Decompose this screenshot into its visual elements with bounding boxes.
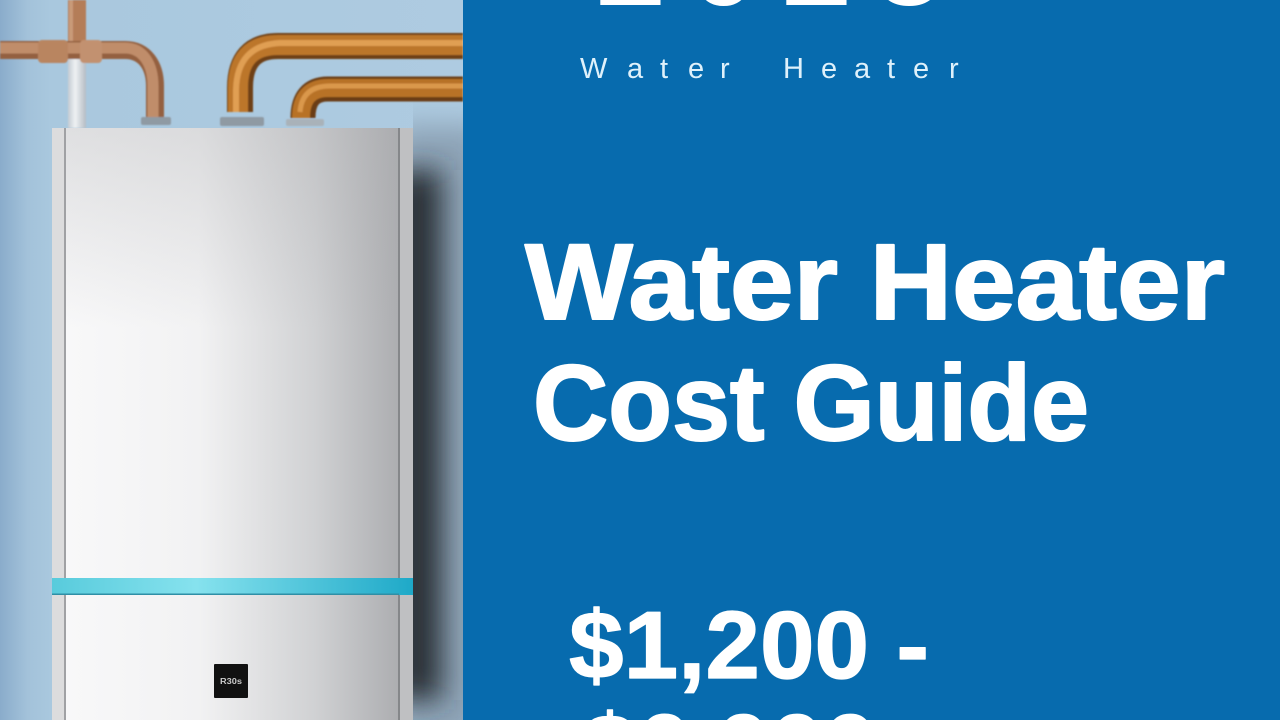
heater shadow on wall [413, 113, 463, 720]
title: Cost Guide [533, 342, 1089, 463]
title: Water Heater [525, 221, 1225, 342]
black logo badge: R30s [220, 677, 243, 686]
teal band [52, 578, 413, 595]
blue panel [463, 0, 1280, 720]
water heater unit [52, 128, 413, 720]
wall background [0, 0, 463, 720]
subtitle: Water Heater [580, 53, 959, 85]
price range: $1,200 - [569, 592, 929, 699]
icon: copper pipes [0, 0, 463, 128]
black logo badge [214, 664, 248, 698]
title [525, 221, 1225, 463]
